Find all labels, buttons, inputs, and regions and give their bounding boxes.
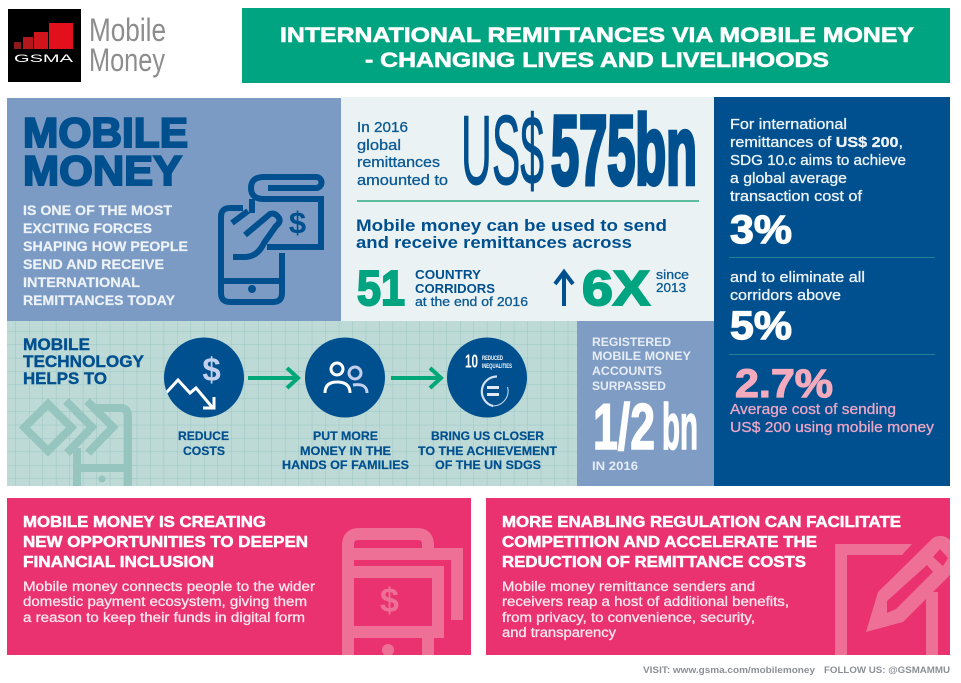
intro text: IS ONE OF THE MOST bbox=[23, 203, 173, 218]
icon: reduce costs bbox=[164, 338, 244, 418]
text: SDG 10.c target: a global average bbox=[730, 171, 847, 187]
heading: mobile technology helps to: TECHNOLOGY bbox=[23, 353, 144, 371]
text: registered accounts: MOBILE MONEY bbox=[592, 349, 691, 363]
text: financial inclusion body: a reason to keep their funds in digital form bbox=[23, 610, 305, 625]
icon: SDG 10 reduced inequalities: 10 bbox=[465, 352, 478, 372]
heading: enabling regulation: MORE ENABLING REGULATION CAN FACILITATE bbox=[502, 514, 901, 531]
text: in 2016 global remittances: In 2016 bbox=[357, 120, 408, 136]
heading: mobile technology helps to bbox=[23, 336, 144, 388]
label: put more money bbox=[282, 429, 409, 472]
label: bring us closer: BRING US CLOSER bbox=[431, 429, 544, 443]
panel: enabling regulation bbox=[486, 498, 950, 655]
panel: registered accounts: bn bbox=[662, 390, 698, 463]
heading: mobile money: MOBILE bbox=[23, 109, 188, 156]
intro text: INTERNATIONAL bbox=[23, 275, 140, 290]
text: registered accounts: ACCOUNTS bbox=[592, 364, 662, 378]
text: financial inclusion body: domestic payment ecosystem, giving them bbox=[23, 594, 307, 609]
label: put more money: PUT MORE bbox=[313, 429, 378, 443]
footer links bbox=[643, 665, 950, 676]
panel: remittances statistics bbox=[341, 95, 714, 321]
stat: up 6X since 2013: 2013 bbox=[656, 280, 686, 295]
title banner bbox=[242, 8, 950, 83]
heading: mobile technology helps to: HELPS TO bbox=[23, 370, 107, 388]
label: reduce costs: COSTS bbox=[183, 444, 225, 458]
text: average cost: Average cost of sending bbox=[730, 402, 896, 418]
arrow bbox=[391, 368, 441, 388]
text: SDG 10.c target: remittances of US$ 200 , bbox=[730, 135, 903, 151]
heading: financial inclusion: NEW OPPORTUNITIES TO DEEPEN bbox=[23, 534, 308, 551]
text: average cost bbox=[730, 402, 935, 436]
stat: 51 country corridors: 51 bbox=[357, 262, 405, 316]
icon: SDG 10 reduced inequalities: REDUCED bbox=[482, 355, 503, 362]
heading: financial inclusion bbox=[23, 514, 308, 571]
big number: US$575bn: US$ bbox=[461, 95, 544, 205]
panel: financial inclusion bbox=[7, 498, 471, 660]
icon: hand, phone and wallet bbox=[221, 177, 322, 302]
label: put more money: HANDS OF FAMILIES bbox=[282, 458, 409, 472]
icon: background phone with chevrons bbox=[24, 401, 128, 490]
text: eliminate corridors bbox=[730, 270, 865, 304]
text: enabling regulation body bbox=[502, 579, 789, 640]
icon: SDG 10 reduced inequalities: INEQUALITIES bbox=[482, 363, 512, 370]
text: SDG 10.c target: transaction cost of bbox=[730, 189, 863, 205]
icon: background phone: $ bbox=[380, 582, 399, 620]
panel: SDG cost targets bbox=[714, 97, 950, 486]
text: registered accounts: REGISTERED bbox=[592, 335, 671, 349]
label: reduce costs: REDUCE bbox=[178, 429, 229, 443]
footer links: FOLLOW US: @GSMAMMU bbox=[824, 665, 950, 676]
text: financial inclusion body bbox=[23, 579, 316, 625]
text: average cost: US$ 200 using mobile money bbox=[730, 420, 935, 436]
stat: 3%: 3% bbox=[730, 208, 792, 252]
heading: enabling regulation bbox=[502, 514, 901, 571]
text: mobile money can be used bbox=[356, 216, 667, 252]
intro text: REMITTANCES TODAY bbox=[23, 293, 175, 308]
text: financial inclusion body: Mobile money connects people to the wider bbox=[23, 579, 316, 594]
arrow bbox=[248, 368, 298, 388]
stat: 2.7%: 2.7% bbox=[735, 362, 833, 406]
heading: enabling regulation: REDUCTION OF REMITTANCE COSTS bbox=[502, 554, 806, 571]
stat: 51 country corridors bbox=[357, 262, 528, 316]
text: enabling regulation body: receivers reap a host of additional benefits, bbox=[502, 594, 789, 609]
text: in 2016 global remittances: global bbox=[357, 138, 401, 154]
label: put more money: MONEY IN THE bbox=[300, 444, 391, 458]
big number: 1/2 bn: 1/2 bbox=[593, 390, 655, 463]
text: registered accounts: SURPASSED bbox=[592, 379, 666, 393]
logo: GSMA Mobile Money: Money bbox=[89, 42, 165, 78]
heading: mobile technology helps to: MOBILE bbox=[23, 336, 90, 354]
panel: registered accounts bbox=[577, 321, 714, 486]
footer links: VISIT: www.gsma.com/mobilemoney bbox=[643, 665, 816, 676]
text: in 2016 global remittances: remittances bbox=[357, 155, 440, 171]
text: mobile money can be used: Mobile money can be used to send bbox=[356, 216, 667, 235]
label: reduce costs bbox=[178, 429, 229, 458]
text: in 2016: IN 2016 bbox=[592, 459, 638, 473]
text: eliminate corridors: corridors above bbox=[730, 288, 841, 304]
icon: SDG 10 reduced inequalities bbox=[447, 338, 527, 418]
text: SDG 10.c target bbox=[730, 117, 906, 205]
heading: enabling regulation: COMPETITION AND ACCELERATE THE bbox=[502, 534, 817, 551]
icon: reduce costs: $ bbox=[202, 351, 221, 388]
intro text: SEND AND RECEIVE bbox=[23, 257, 164, 272]
intro text: EXCITING FORCES bbox=[23, 221, 152, 236]
text: mobile money can be used: and receive remittances across bbox=[356, 233, 632, 252]
text: enabling regulation body: from privacy, to convenience, security, bbox=[502, 610, 755, 625]
label: bring us closer bbox=[418, 429, 558, 472]
stat: 51 country corridors: COUNTRY bbox=[415, 268, 482, 282]
text: enabling regulation body: and transparency bbox=[502, 625, 616, 640]
label: bring us closer: OF THE UN SDGS bbox=[435, 458, 541, 472]
logo: GSMA Mobile Money: GSMA bbox=[14, 53, 74, 65]
icon: hand, phone and wallet: $ bbox=[289, 205, 306, 240]
text: enabling regulation body: Mobile money remittance senders and bbox=[502, 579, 755, 594]
intro text: SHAPING HOW PEOPLE bbox=[23, 239, 188, 254]
stat: 51 country corridors: CORRIDORS bbox=[415, 282, 495, 296]
text: in 2016 global remittances: amounted to bbox=[357, 173, 448, 189]
stat: up 6X since 2013: 6X bbox=[582, 262, 650, 316]
big number: US$575bn: 575bn bbox=[551, 95, 697, 205]
text: eliminate corridors: and to eliminate all bbox=[730, 270, 865, 286]
heading: financial inclusion: FINANCIAL INCLUSION bbox=[23, 554, 214, 571]
stat: 5%: 5% bbox=[730, 304, 792, 348]
text: in 2016 global remittances bbox=[357, 120, 448, 189]
text: SDG 10.c target: SDG 10.c aims to achieve bbox=[730, 153, 906, 169]
title banner: INTERNATIONAL REMITTANCES VIA MOBILE MONEY bbox=[280, 23, 914, 47]
logo: GSMA Mobile Money bbox=[8, 9, 166, 82]
heading: mobile money bbox=[23, 109, 188, 194]
logo: GSMA Mobile Money: Mobile bbox=[89, 12, 166, 48]
panel: mobile technology helps to bbox=[7, 321, 577, 490]
stat: up 6X since 2013: since bbox=[656, 267, 689, 282]
icon: background phone bbox=[348, 534, 457, 660]
heading: mobile money: MONEY bbox=[23, 147, 182, 194]
text: SDG 10.c target: For international bbox=[730, 117, 847, 133]
icon: families bbox=[305, 338, 385, 418]
text: registered accounts bbox=[592, 335, 691, 393]
intro text bbox=[23, 203, 188, 308]
heading: financial inclusion: MOBILE MONEY IS CREATING bbox=[23, 514, 266, 531]
label: bring us closer: TO THE ACHIEVEMENT bbox=[418, 444, 558, 458]
panel: mobile money intro bbox=[7, 98, 341, 321]
stat: 51 country corridors: at the end of 2016 bbox=[415, 294, 528, 309]
title banner: - CHANGING LIVES AND LIVELIHOODS bbox=[365, 48, 829, 72]
icon: background pen and square bbox=[835, 536, 950, 655]
stat: up 6X since 2013 bbox=[555, 262, 689, 316]
